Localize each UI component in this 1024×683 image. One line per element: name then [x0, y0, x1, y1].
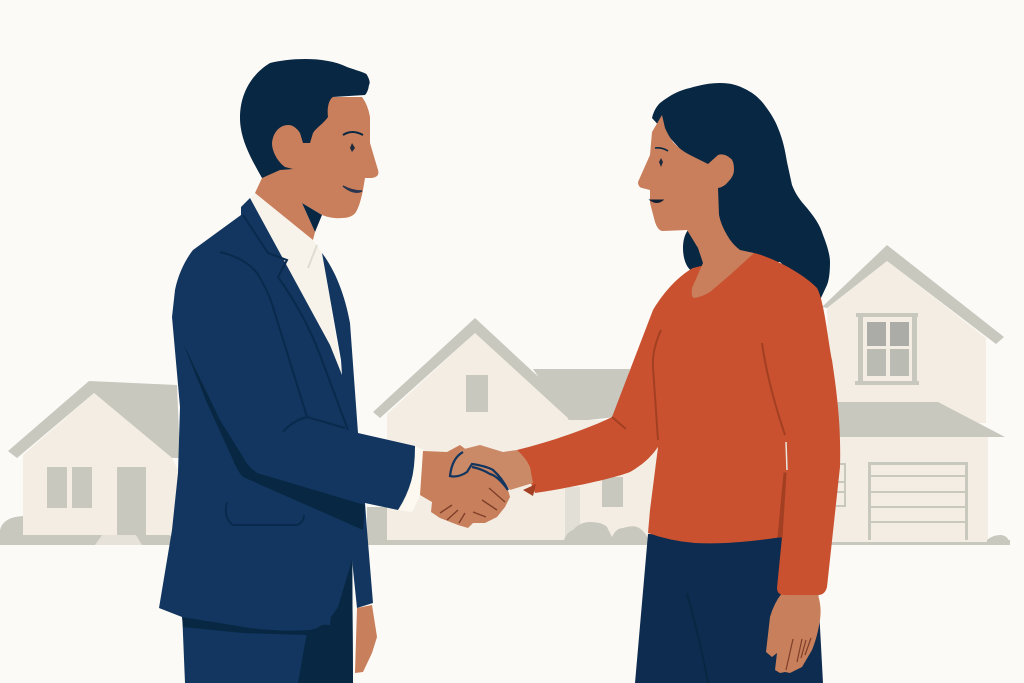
hand: woman's left: [766, 593, 821, 673]
finger lines: [450, 452, 508, 490]
ground line: [0, 507, 1010, 545]
sweater: [517, 253, 840, 595]
face and neck: [638, 115, 754, 298]
neck shadow: [302, 203, 322, 232]
sweater folds: [612, 330, 785, 440]
trousers: [635, 534, 823, 683]
eyebrow and eye: [655, 148, 668, 151]
shirt: [250, 193, 342, 375]
jacket folds: [220, 215, 348, 432]
house: centre: [373, 318, 657, 543]
hair: [652, 83, 830, 300]
man's hand: [420, 445, 510, 528]
cuff: [398, 446, 424, 512]
icon: handshake: [420, 445, 536, 528]
face and neck: [255, 97, 378, 240]
hand: man's left: [355, 605, 377, 673]
trousers: [182, 530, 353, 683]
house: left: [8, 381, 180, 545]
figure: woman: [517, 83, 840, 683]
house: right: [822, 245, 1010, 544]
eyebrow and eye: [343, 132, 363, 135]
mouth: [343, 186, 362, 192]
hair: [240, 59, 370, 178]
jacket: [159, 198, 415, 631]
mouth: [650, 200, 663, 202]
sweater cuff: [523, 484, 536, 496]
background: neighbourhood houses: [0, 245, 1010, 545]
woman's hand: [450, 445, 533, 490]
figure: man: [159, 59, 424, 683]
